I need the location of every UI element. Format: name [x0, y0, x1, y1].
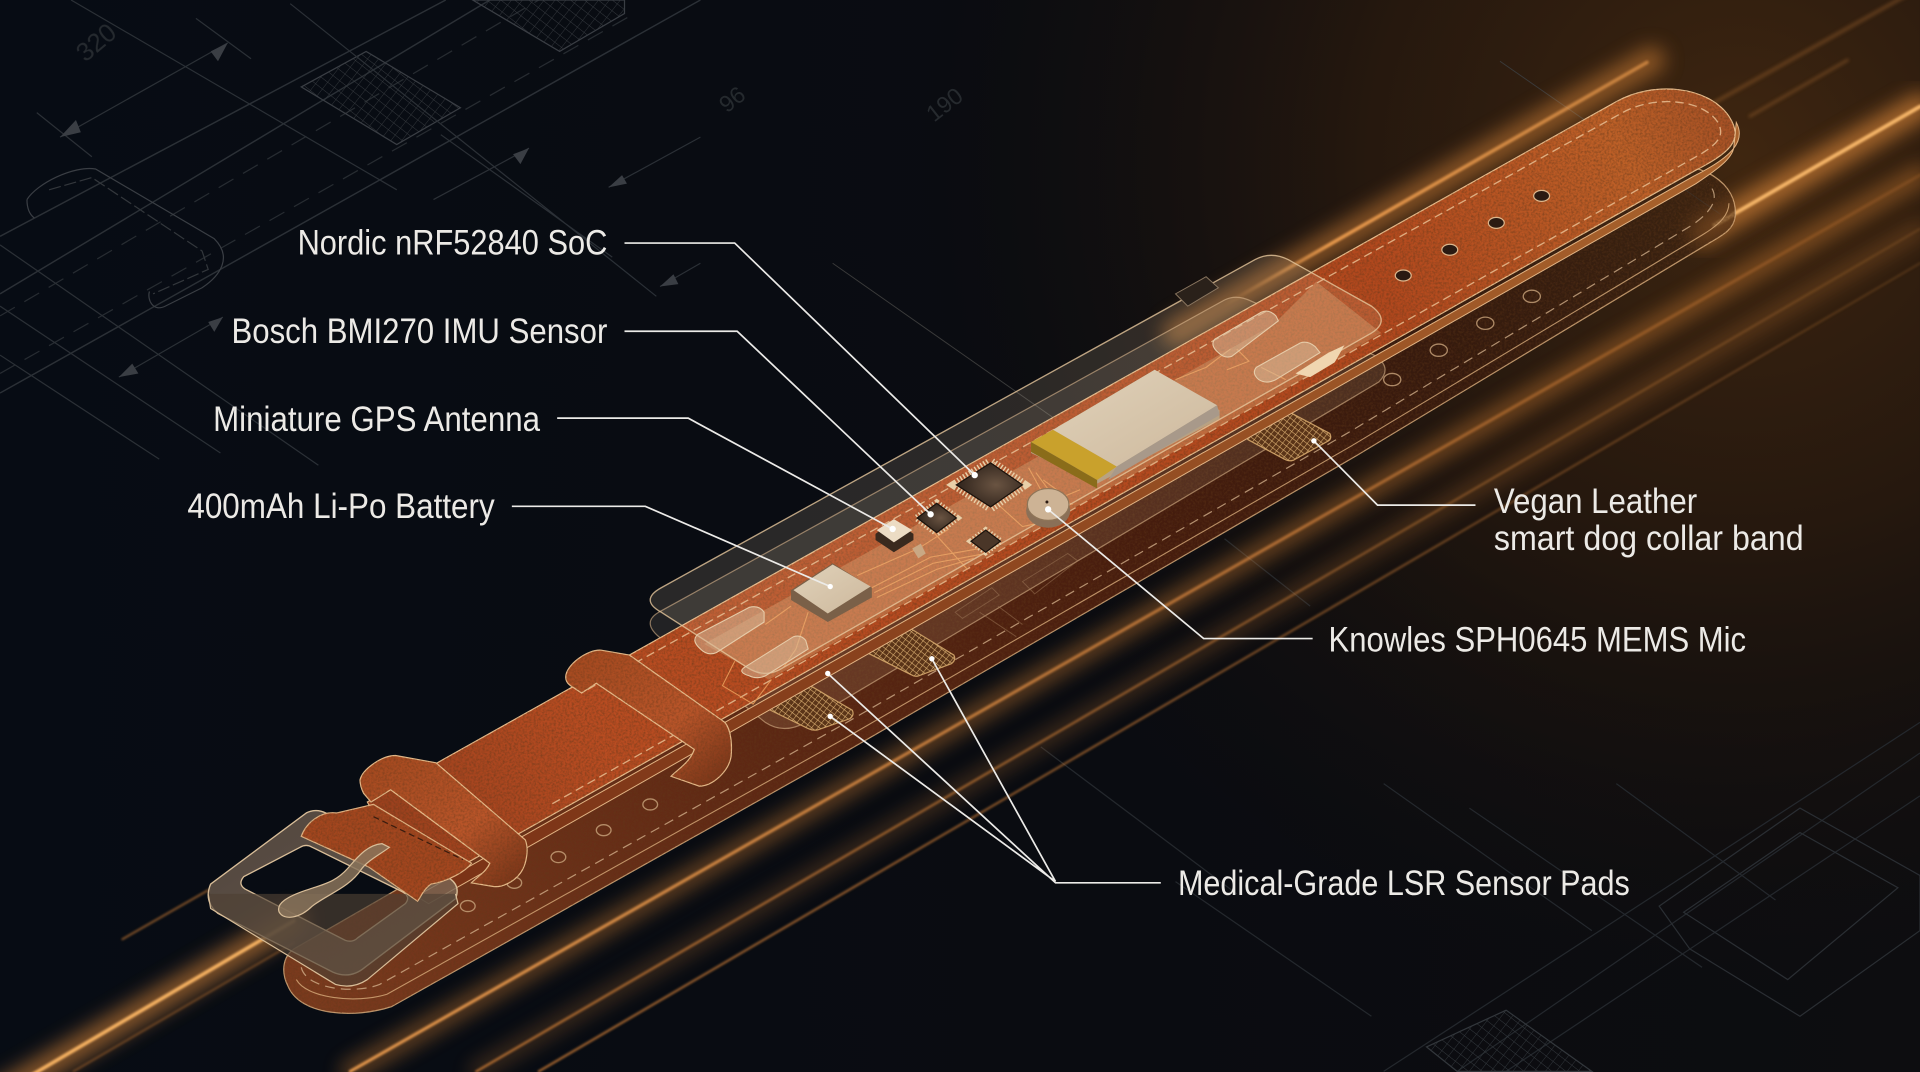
streak: left faint — [122, 890, 208, 939]
blueprint: dimension labels: 96 — [714, 81, 750, 118]
label: Vegan Leather smart dog collar band: Vegan Leather — [1494, 481, 1697, 521]
label: Nordic nRF52840 SoC: Nordic nRF52840 SoC — [298, 223, 607, 263]
upper strap face — [367, 89, 1735, 891]
glass panel: lower layer — [650, 297, 1385, 729]
upper strap stitching — [551, 102, 1721, 804]
component: MEMS microphone — [1026, 489, 1070, 528]
buckle lower edge — [208, 894, 458, 986]
component: Li-Po battery — [1031, 370, 1220, 489]
contact pad: right 2 — [1254, 342, 1320, 382]
leader lines — [512, 243, 1475, 883]
lower strap holes — [460, 290, 1540, 912]
component: battery module — [791, 563, 872, 622]
blueprint: dimension labels: 320 — [71, 18, 122, 68]
leader dots — [825, 438, 1317, 719]
label: Miniature GPS Antenna: Miniature GPS Antenna — [213, 399, 540, 439]
blueprint: dimension labels: 190 — [921, 82, 968, 127]
blueprint: dimension labels — [71, 18, 968, 127]
keeper loop: upper — [566, 650, 731, 786]
label: Vegan Leather smart dog collar band — [1494, 481, 1804, 558]
streak: bottom left bright — [0, 921, 294, 1072]
label: Knowles SPH0645 MEMS Mic: Knowles SPH0645 MEMS Mic — [1329, 619, 1746, 659]
buckle prong — [279, 844, 389, 917]
streak: right bright — [1702, 107, 1920, 233]
sensor pads under strap — [767, 411, 1331, 730]
leader: Li-Po — [512, 506, 830, 587]
contact pads — [695, 311, 1320, 678]
leader: LSR pads — [828, 659, 1161, 883]
streak: lower tertiary — [539, 263, 1920, 1071]
sensor pad: right — [1247, 411, 1331, 461]
upper strap holes — [1395, 190, 1550, 281]
component: small chip — [971, 530, 1000, 552]
faint under-strap parts — [955, 553, 1078, 637]
label: Medical-Grade LSR Sensor Pads: Medical-Grade LSR Sensor Pads — [1178, 863, 1630, 903]
streak: top right faint — [1690, 0, 1920, 116]
lower strap stitching — [301, 184, 1714, 989]
contact pad: right 1 — [1213, 311, 1278, 357]
leader: Vegan leather — [1314, 441, 1475, 505]
label: Bosch BMI270 IMU Sensor: Bosch BMI270 IMU Sensor — [231, 311, 608, 351]
buckle frame — [208, 811, 457, 975]
leader: GPS — [557, 418, 893, 529]
collar: upper strap — [367, 89, 1739, 904]
blueprint: bottom right — [1041, 539, 1920, 1071]
streak: lower secondary — [476, 229, 1920, 1071]
leader: Bosch — [625, 331, 931, 514]
leader: MEMS mic — [1048, 509, 1313, 639]
glass panel: top layer — [650, 255, 1381, 673]
sensor pad: centre — [869, 628, 955, 676]
component: IMU chip — [917, 503, 956, 533]
strap fold over buckle — [301, 804, 471, 901]
label: 400mAh Li-Po Battery: 400mAh Li-Po Battery — [187, 486, 495, 526]
streak: lower bright — [350, 175, 1920, 1071]
streak: top behind strap — [1176, 60, 1652, 333]
contact pad: left 2 — [742, 636, 808, 678]
PCB layer over strap — [704, 282, 1381, 680]
contact pad: left 1 — [695, 607, 764, 654]
fold stitching — [373, 817, 463, 860]
leader: Nordic — [625, 243, 975, 475]
streak: bottom left under strap — [74, 943, 294, 1071]
collar: lower strap — [284, 164, 1735, 1013]
faint construction lines — [833, 61, 1720, 435]
upper strap side — [416, 122, 1739, 904]
panel notch — [1176, 277, 1218, 306]
component: Nordic SoC — [956, 463, 1022, 507]
sensor pad: left — [767, 684, 853, 730]
label: Vegan Leather smart dog collar band: smart dog collar band — [1494, 518, 1804, 558]
connector flex — [1295, 345, 1344, 377]
blueprint: top left — [0, 0, 700, 465]
component: GPS antenna — [876, 519, 926, 558]
keeper loop: lower — [360, 755, 527, 887]
circuit traces — [722, 349, 1286, 704]
buckle — [208, 804, 471, 986]
lower strap edge line — [296, 203, 1729, 999]
